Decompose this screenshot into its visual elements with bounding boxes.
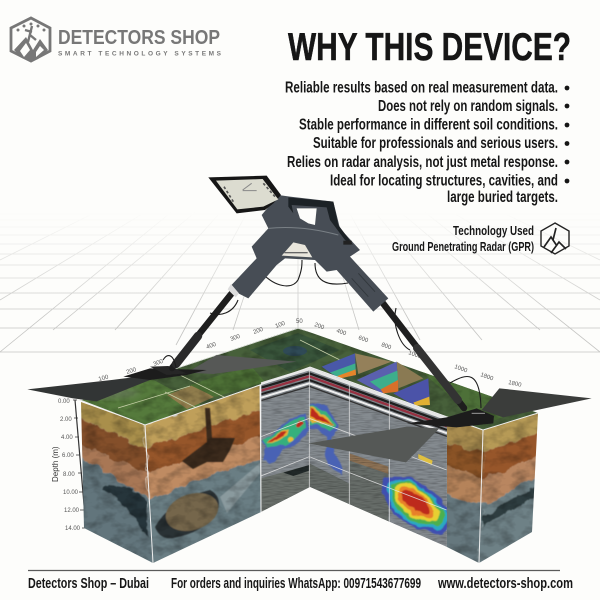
logo <box>11 18 222 62</box>
logo wordmark: DETECTORS SHOP <box>58 26 220 49</box>
surface axis labels: 800 <box>380 342 392 352</box>
icon: small hexagon climber <box>541 223 569 254</box>
technology used note <box>392 223 569 254</box>
large heat signature <box>381 476 447 536</box>
surface axis labels: 1800 <box>508 380 523 389</box>
surface axis labels: 400 <box>206 342 218 351</box>
shallow reflector <box>418 454 433 465</box>
handle opening <box>297 208 317 225</box>
footer <box>28 576 573 592</box>
side face layers <box>81 402 155 563</box>
grip top <box>288 197 353 245</box>
footer: For orders and inquiries WhatsApp: 00971543677699 <box>171 576 421 592</box>
left antenna plates <box>27 355 297 401</box>
detector tablet <box>208 176 281 213</box>
technology used note: Ground Penetrating Radar (GPR) <box>392 240 534 254</box>
depth axis: 10.00 <box>63 490 79 496</box>
surface axis labels <box>98 319 523 389</box>
depth axis: 6.00 <box>62 453 74 459</box>
surface axis labels: 1800 <box>479 372 495 383</box>
right grip detail <box>352 273 375 297</box>
benefits list <box>285 80 569 206</box>
reflection stripes <box>261 369 447 436</box>
surface axis labels: 1000 <box>407 350 423 361</box>
surface axis labels: 100 <box>275 321 287 330</box>
surface axis labels: 50 <box>296 319 303 325</box>
logo tagline: SMART TECHNOLOGY SYSTEMS <box>58 50 222 58</box>
surface axis labels: 300 <box>153 359 165 368</box>
left heat signature <box>262 413 309 463</box>
detector legs <box>172 293 464 408</box>
perspective grid floor <box>0 226 600 352</box>
block edge highlights <box>80 367 538 563</box>
right block soil faces <box>447 414 538 563</box>
depth axis: 14.00 <box>65 526 81 532</box>
panel dividers and depth gridlines <box>261 367 447 527</box>
buried cavity <box>155 463 260 538</box>
left block soil faces <box>81 386 261 563</box>
radar scan walls <box>261 368 447 547</box>
surface axis labels: 600 <box>357 335 369 345</box>
footer rule <box>28 570 560 572</box>
left grip collar <box>228 284 239 297</box>
depth axis: 2.00 <box>60 417 72 423</box>
cables <box>163 260 481 408</box>
underground void with shaft <box>182 408 235 469</box>
surface axis labels: 200 <box>313 322 325 332</box>
depth axis: 4.00 <box>61 435 73 441</box>
radargram banding <box>257 363 450 550</box>
depth axis: 0.00 <box>58 399 70 405</box>
white badge <box>282 242 312 257</box>
front face layers <box>142 386 261 563</box>
technology used note: Technology Used <box>453 224 534 238</box>
surface axis labels: 300 <box>230 334 242 343</box>
surface axis labels: 100 <box>98 374 110 383</box>
logo icon: hexagon with climber <box>11 18 50 62</box>
top surface radar insets <box>322 353 430 406</box>
aerial ground surface <box>80 328 538 430</box>
detector body <box>228 195 388 312</box>
surface axis labels: 200 <box>126 367 138 376</box>
antenna plate shadow <box>60 388 140 398</box>
depth axis: 8.00 <box>63 472 75 478</box>
benefits list: large buried targets. <box>447 189 558 206</box>
surface axis labels: 200 <box>253 327 265 336</box>
rock and soil strata <box>261 465 309 513</box>
surface axis labels: 1000 <box>453 364 469 375</box>
body ridge <box>268 227 338 235</box>
depth axis title: Depth (m) <box>51 446 60 482</box>
footer: Detectors Shop – Dubai <box>28 576 149 592</box>
tablet screen <box>216 179 278 209</box>
central heat signature <box>310 405 340 475</box>
depth axis <box>51 399 86 532</box>
right antenna plates <box>308 388 592 462</box>
surface axis labels: 400 <box>335 328 347 338</box>
depth axis: 12.00 <box>64 508 80 514</box>
